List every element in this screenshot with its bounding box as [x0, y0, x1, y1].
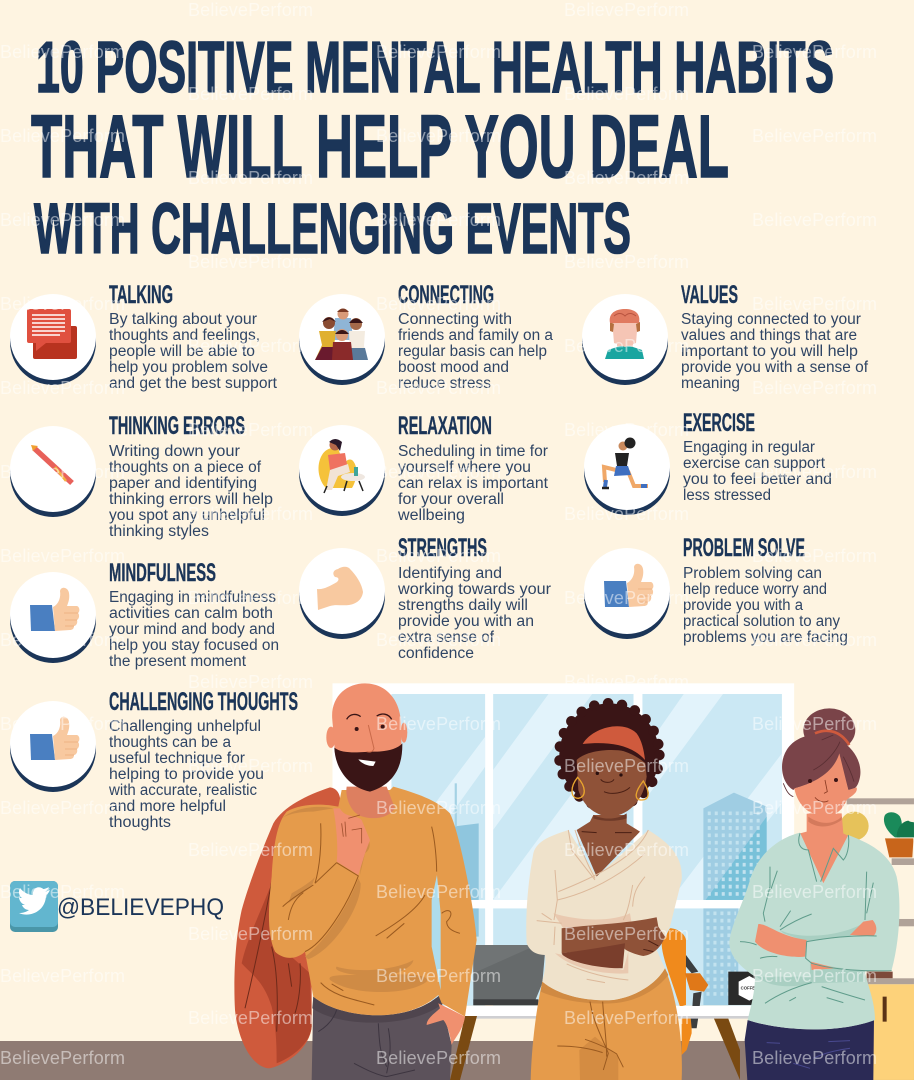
panel: problem solve — [584, 534, 848, 646]
watermark grid: BelievePerform — [376, 42, 501, 62]
heading: PROBLEM SOLVE — [683, 534, 805, 562]
text block: values and things that are — [681, 327, 857, 344]
heading: CHALLENGING THOUGHTS — [109, 688, 298, 716]
text block: wellbeing — [397, 507, 465, 524]
watermark grid: BelievePerform — [0, 462, 125, 482]
coffee label: COFFEE — [741, 986, 759, 992]
watermark grid: BelievePerform — [564, 1008, 689, 1028]
watermark grid: BelievePerform — [0, 294, 125, 314]
watermark grid: BelievePerform — [752, 966, 877, 986]
watermark grid: BelievePerform — [188, 168, 313, 188]
text block: your mind and body and — [109, 621, 275, 638]
watermark grid: BelievePerform — [188, 588, 313, 608]
text block — [681, 311, 869, 392]
panel: exercise — [584, 409, 832, 515]
text block: thoughts can be a — [109, 734, 231, 751]
text block — [683, 439, 832, 504]
watermark grid: BelievePerform — [376, 546, 501, 566]
watermark grid: BelievePerform — [376, 462, 501, 482]
text block: friends and family on a — [398, 327, 553, 344]
watermark grid: BelievePerform — [752, 126, 877, 146]
text block: By talking about your — [109, 311, 257, 328]
text block — [109, 443, 273, 540]
person: woman with afro and headband — [526, 703, 682, 1080]
watermark grid: BelievePerform — [188, 672, 313, 692]
text block: for your overall — [398, 491, 504, 508]
panel: mindfulness — [10, 559, 279, 670]
text block: provide you with a sense of — [681, 359, 869, 376]
text block: exercise can support — [683, 455, 826, 472]
text block: strengths daily will — [398, 597, 528, 614]
watermark grid: BelievePerform — [188, 1008, 313, 1028]
handle text: @BELIEVEPHQ — [57, 894, 224, 921]
watermark grid: BelievePerform — [752, 294, 877, 314]
watermark grid: BelievePerform — [564, 924, 689, 944]
left desk leg — [450, 1016, 477, 1080]
heading: STRENGTHS — [398, 534, 487, 562]
panel: values — [582, 281, 869, 392]
watermark grid: BelievePerform — [376, 126, 501, 146]
watermark grid: BelievePerform — [188, 420, 313, 440]
text block: the present moment — [109, 653, 247, 670]
text block: meaning — [681, 375, 740, 392]
watermark grid: BelievePerform — [564, 420, 689, 440]
watermark grid: BelievePerform — [0, 126, 125, 146]
text block: important to you will help — [681, 343, 858, 360]
text block: thinking errors will help — [109, 491, 273, 508]
watermark grid: BelievePerform — [752, 630, 877, 650]
watermark grid: BelievePerform — [752, 714, 877, 734]
text block: with accurate, realistic — [108, 782, 257, 799]
text block — [397, 565, 551, 662]
watermark grid: BelievePerform — [188, 252, 313, 272]
text block: working towards your — [397, 581, 551, 598]
text block: thoughts and feelings, — [109, 327, 260, 344]
panel: thinking errors — [10, 412, 273, 540]
text block: can relax is important — [398, 475, 549, 492]
watermark grid: BelievePerform — [376, 294, 501, 314]
text block: Engaging in regular — [683, 439, 815, 456]
text block: and get the best support — [109, 375, 278, 392]
floor strip — [0, 1041, 914, 1080]
text block: confidence — [398, 645, 474, 662]
watermark grid: BelievePerform — [0, 966, 125, 986]
watermark grid: BelievePerform — [0, 210, 125, 230]
watermark grid: BelievePerform — [752, 378, 877, 398]
panel: relaxation — [299, 412, 549, 524]
text block: problems you are facing — [683, 629, 848, 646]
icon: head with brain — [582, 294, 668, 385]
watermark grid: BelievePerform — [564, 168, 689, 188]
watermark grid: BelievePerform — [564, 252, 689, 272]
watermark grid: BelievePerform — [376, 1048, 501, 1068]
text block: less stressed — [683, 487, 771, 504]
text block: you spot any unhelpful — [109, 507, 265, 524]
text block: Problem solving can — [683, 565, 822, 582]
desk, laptop, chair and coffee box — [330, 928, 767, 1080]
watermark grid: BelievePerform — [0, 630, 125, 650]
watermark grid: BelievePerform — [188, 84, 313, 104]
text block: help you problem solve — [109, 359, 268, 376]
watermark grid: BelievePerform — [564, 588, 689, 608]
watermark grid: BelievePerform — [188, 336, 313, 356]
icon: pencil — [10, 426, 96, 517]
heading: VALUES — [681, 281, 738, 309]
watermark grid: BelievePerform — [564, 504, 689, 524]
watermark grid: BelievePerform — [564, 756, 689, 776]
text block: useful technique for — [109, 750, 245, 767]
text block: provide you with an — [398, 613, 534, 630]
panel: talking — [10, 281, 278, 392]
text block: activities can calm both — [109, 605, 273, 622]
watermark grid: BelievePerform — [188, 840, 313, 860]
watermark grid: BelievePerform — [752, 462, 877, 482]
text block: regular basis can help — [398, 343, 547, 360]
watermark grid: BelievePerform — [376, 630, 501, 650]
person: woman in mint shirt with bun — [729, 708, 899, 1080]
text block: provide you with a — [683, 597, 803, 614]
text block: Identifying and — [398, 565, 502, 582]
text block: thinking styles — [109, 523, 209, 540]
heading: CONNECTING — [398, 281, 494, 309]
text block: thoughts — [109, 814, 171, 831]
text block: Scheduling in time for — [398, 443, 548, 460]
icon: person lunging — [584, 424, 670, 515]
icon: thumbs up — [584, 548, 670, 639]
text block: helping to provide you — [109, 766, 264, 783]
icon: thumbs up — [10, 572, 96, 663]
heading: MINDFULNESS — [109, 559, 216, 587]
watermark grid: BelievePerform — [0, 546, 125, 566]
text block: paper and identifying — [109, 475, 257, 492]
text block: Challenging unhelpful — [109, 718, 261, 735]
watermark grid: BelievePerform — [188, 924, 313, 944]
icon: flexed arm — [299, 548, 385, 639]
watermark grid: BelievePerform — [752, 42, 877, 62]
watermark grid: BelievePerform — [0, 798, 125, 818]
watermark grid: BelievePerform — [0, 1048, 125, 1068]
person: bearded man in orange sweater — [234, 683, 477, 1080]
social handle — [10, 881, 224, 932]
icon: family group — [299, 294, 385, 385]
heading: THINKING ERRORS — [109, 412, 245, 440]
text block — [109, 311, 278, 392]
text block — [109, 589, 279, 670]
text block: Writing down your — [109, 443, 240, 460]
text block: boost mood and — [398, 359, 509, 376]
watermark grid: BelievePerform — [752, 210, 877, 230]
watermark grid: BelievePerform — [564, 84, 689, 104]
heading: EXERCISE — [683, 409, 755, 437]
text block: practical solution to any — [683, 613, 840, 630]
text block — [108, 718, 264, 831]
text block: reduce stress — [398, 375, 491, 392]
text block: thoughts on a piece of — [109, 459, 262, 476]
watermark grid: BelievePerform — [0, 378, 125, 398]
watermark grid: BelievePerform — [376, 882, 501, 902]
watermark grid: BelievePerform — [564, 0, 689, 20]
text block — [398, 311, 553, 392]
text block — [397, 443, 549, 524]
watermark grid: BelievePerform — [188, 756, 313, 776]
shelves, plant, globe and cabinet — [840, 798, 914, 1080]
title — [31, 28, 834, 269]
watermark grid: BelievePerform — [376, 378, 501, 398]
text block: and more helpful — [109, 798, 226, 815]
icon: woman relaxing in armchair — [299, 425, 385, 516]
text block: you to feel better and — [683, 471, 832, 488]
watermark grid: BelievePerform — [376, 798, 501, 818]
text block — [683, 565, 848, 646]
watermark grid: BelievePerform — [0, 42, 125, 62]
heading: TALKING — [109, 281, 173, 309]
watermark grid: BelievePerform — [752, 798, 877, 818]
text block: people will be able to — [109, 343, 255, 360]
window with city view — [333, 683, 794, 1006]
watermark grid: BelievePerform — [376, 966, 501, 986]
icon: twitter bird — [10, 881, 58, 932]
text block: Connecting with — [398, 311, 512, 328]
icon: thumbs up — [10, 701, 96, 792]
watermark grid: BelievePerform — [752, 882, 877, 902]
panel: challenging thoughts — [10, 688, 298, 831]
watermark grid: BelievePerform — [188, 0, 313, 20]
text block: help you stay focused on — [109, 637, 279, 654]
panel: connecting — [299, 281, 553, 392]
text block: Engaging in mindfulness — [109, 589, 276, 606]
text block: help reduce worry and — [683, 581, 827, 598]
watermark grid: BelievePerform — [752, 546, 877, 566]
watermark grid: BelievePerform — [564, 672, 689, 692]
watermark grid: BelievePerform — [188, 504, 313, 524]
icon: speech bubbles — [10, 294, 96, 385]
text block: Staying connected to your — [681, 311, 861, 328]
text block: yourself where you — [398, 459, 531, 476]
heading: RELAXATION — [398, 412, 492, 440]
watermark grid: BelievePerform — [376, 210, 501, 230]
watermark grid: BelievePerform — [376, 714, 501, 734]
watermark grid: BelievePerform — [564, 336, 689, 356]
watermark grid: BelievePerform — [752, 1048, 877, 1068]
watermark grid: BelievePerform — [564, 840, 689, 860]
text block: extra sense of — [398, 629, 495, 646]
watermark grid: BelievePerform — [0, 714, 125, 734]
watermark grid: BelievePerform — [0, 882, 125, 902]
panel: strengths — [299, 534, 551, 662]
